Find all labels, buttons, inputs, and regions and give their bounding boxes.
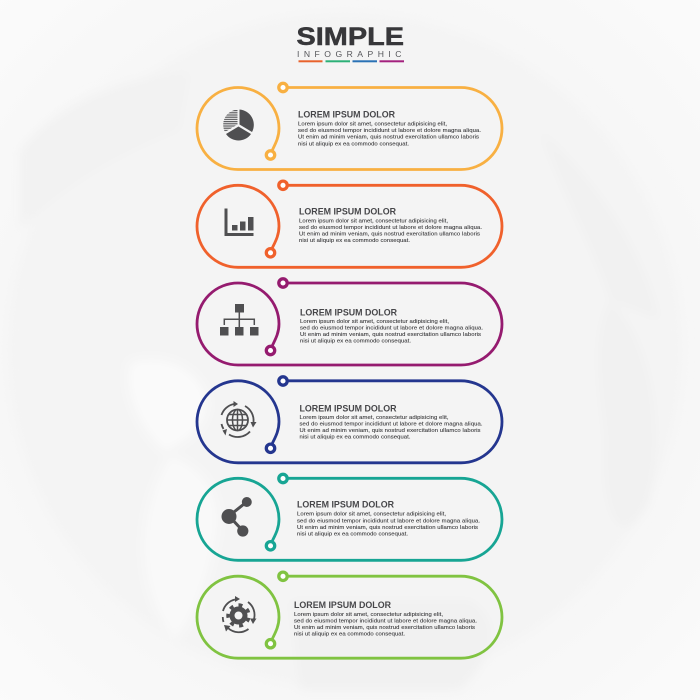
panel 4: blue (197, 377, 502, 463)
panel 2: orange (197, 181, 502, 267)
body text: nisi ut aliquip ex ea commodo consequat. (300, 434, 411, 440)
connector node top (279, 83, 287, 92)
body text: Ut enim ad minim veniam, quis nostrud exercitation ullamco laboris (300, 332, 481, 338)
body text: Lorem ipsum dolor sit amet, consectetur adipisicing elit, (294, 612, 443, 618)
body text: nisi ut aliquip ex ea commodo consequat. (299, 238, 410, 244)
panel outline (197, 478, 502, 560)
body text: Lorem ipsum dolor sit amet, consectetur adipisicing elit, (300, 319, 449, 325)
icon: share nodes (222, 497, 252, 537)
panel 1: yellow (197, 83, 502, 170)
body text: Lorem ipsum dolor sit amet, consectetur adipisicing elit, (300, 415, 449, 421)
subtitle: INFOGRAPHIC: INFOGRAPHIC (297, 49, 402, 59)
icon: globe with arrows (222, 401, 256, 437)
panel outline (197, 576, 502, 658)
body text: Lorem ipsum dolor sit amet, consectetur adipisicing elit, (297, 512, 446, 518)
connector node top (279, 181, 287, 190)
heading: LOREM IPSUM DOLOR (294, 600, 391, 611)
heading: LOREM IPSUM DOLOR (300, 403, 397, 414)
body text: sed do eiusmod tempor incididunt ut labore et dolore magna aliqua. (300, 326, 483, 332)
body text (300, 319, 483, 345)
heading: LOREM IPSUM DOLOR (299, 206, 396, 218)
body text (298, 122, 481, 147)
body text: nisi ut aliquip ex ea commodo consequat. (300, 339, 411, 345)
connector node top (279, 279, 287, 287)
connector node bottom (266, 249, 275, 257)
title word: SIMPLE: SIMPLE (296, 23, 404, 51)
body text: nisi ut aliquip ex ea commodo consequat. (298, 141, 409, 147)
body text: sed do eiusmod tempor incididunt ut labore et dolore magna aliqua. (300, 422, 483, 428)
connector node top (279, 377, 287, 385)
body text: Ut enim ad minim veniam, quis nostrud exercitation ullamco laboris (297, 525, 478, 531)
title (296, 23, 404, 62)
body text: Lorem ipsum dolor sit amet, consectetur adipisicing elit, (298, 122, 447, 128)
panel outline (197, 381, 502, 463)
icon: bar chart (224, 208, 254, 236)
body text: Ut enim ad minim veniam, quis nostrud exercitation ullamco laboris (299, 231, 480, 237)
body text (297, 512, 480, 537)
body text: nisi ut aliquip ex ea commodo consequat. (297, 531, 408, 537)
panel outline (197, 88, 502, 170)
panel 3: purple (197, 279, 502, 365)
heading: LOREM IPSUM DOLOR (298, 110, 395, 120)
icon: hierarchy (220, 304, 258, 336)
connector node bottom (266, 444, 275, 452)
body text: sed do eiusmod tempor incididunt ut labore et dolore magna aliqua. (298, 128, 481, 134)
connector node bottom (266, 346, 275, 355)
panel outline (197, 185, 502, 267)
body text: sed do eiusmod tempor incididunt ut labore et dolore magna aliqua. (297, 518, 480, 524)
title colour bars (298, 60, 404, 62)
body text: sed do eiusmod tempor incididunt ut labore et dolore magna aliqua. (294, 618, 477, 624)
panel 6: green (197, 572, 502, 658)
connector node bottom (266, 640, 275, 648)
connector node top (279, 572, 287, 580)
body text: Ut enim ad minim veniam, quis nostrud exercitation ullamco laboris (300, 428, 481, 434)
body text (300, 415, 483, 440)
connector node top (279, 474, 287, 483)
body text: Ut enim ad minim veniam, quis nostrud exercitation ullamco laboris (298, 135, 479, 141)
body text (294, 612, 477, 638)
panel 5: teal (197, 474, 502, 560)
heading: LOREM IPSUM DOLOR (300, 307, 397, 318)
body text (299, 218, 482, 244)
connector node bottom (266, 542, 275, 550)
heading: LOREM IPSUM DOLOR (297, 500, 394, 511)
body text: Lorem ipsum dolor sit amet, consectetur adipisicing elit, (299, 218, 448, 224)
body text: Ut enim ad minim veniam, quis nostrud exercitation ullamco laboris (294, 625, 475, 631)
body text: sed do eiusmod tempor incididunt ut labore et dolore magna aliqua. (299, 225, 482, 231)
panel outline (197, 283, 502, 365)
body text: nisi ut aliquip ex ea commodo consequat. (294, 632, 405, 638)
icon: pie chart (223, 110, 254, 140)
connector node bottom (266, 151, 275, 159)
icon: gear with arrows (223, 596, 256, 632)
